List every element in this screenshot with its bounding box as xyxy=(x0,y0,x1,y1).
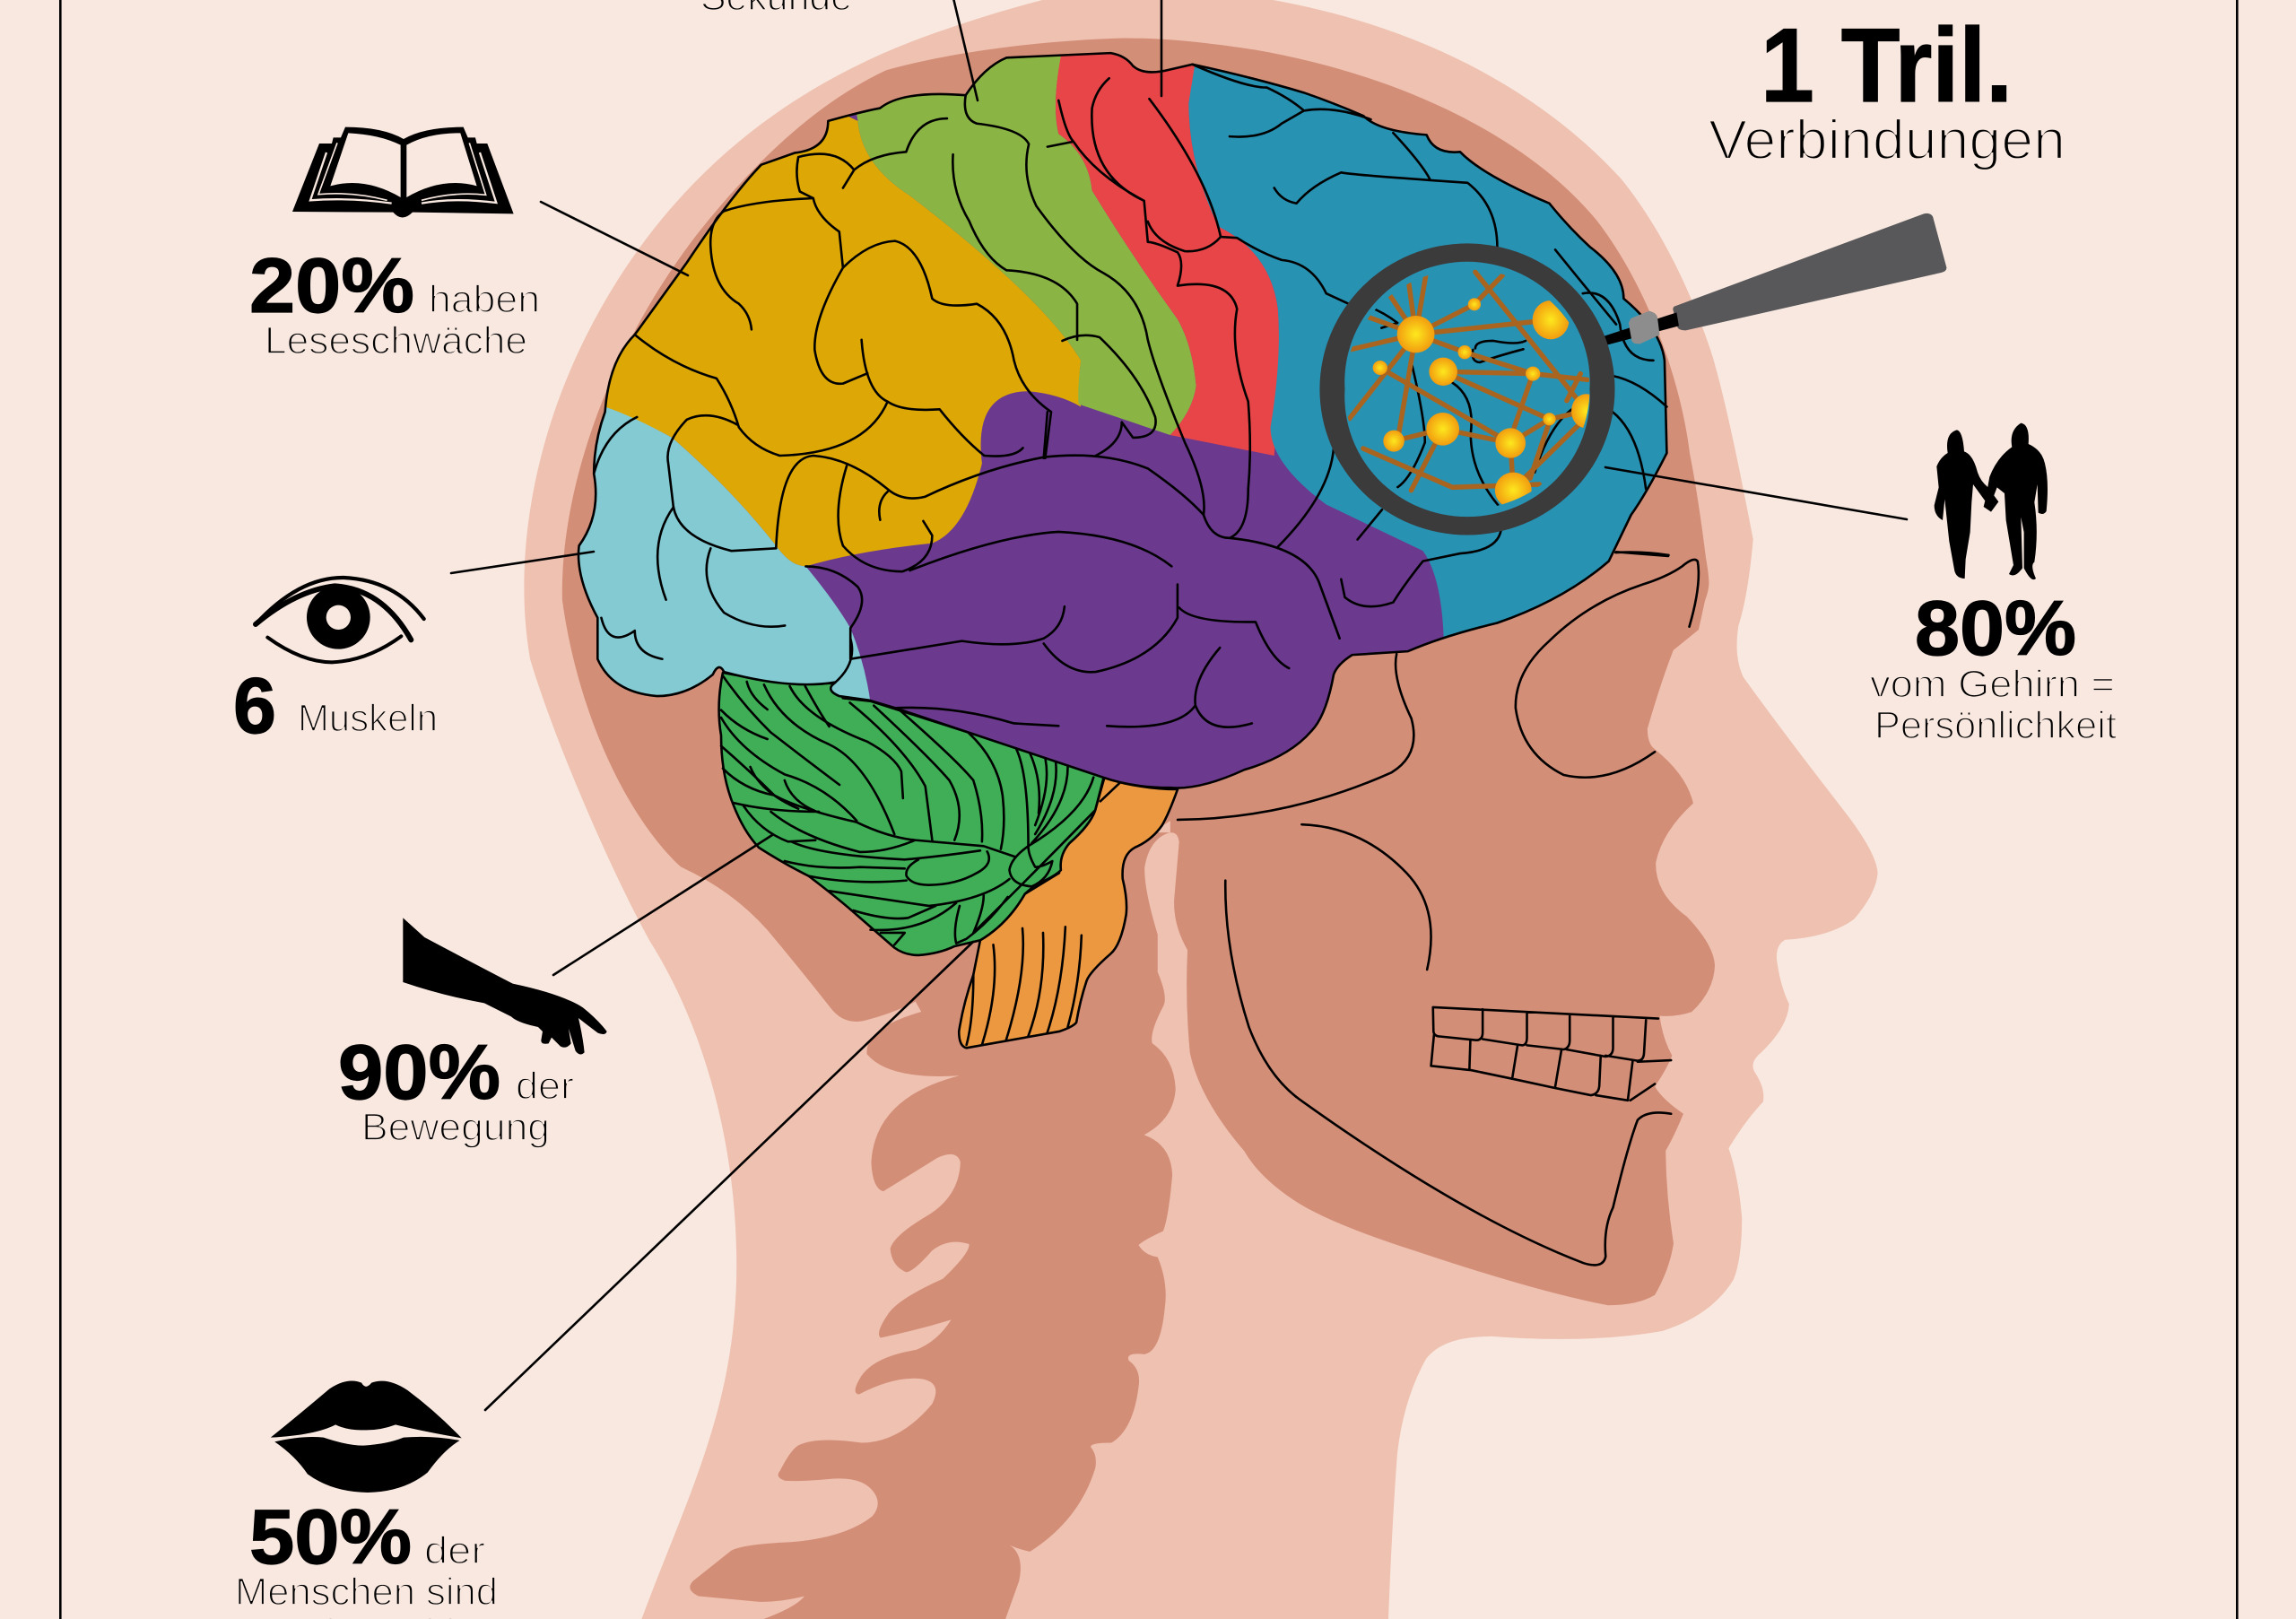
brain outline xyxy=(578,53,1666,788)
stat: 6 Muskeln: Muskeln xyxy=(298,697,438,740)
stat: 50% der Menschen xyxy=(235,1494,498,1619)
stat: 20% Leseschwäche: 20% xyxy=(249,243,414,329)
label: 1 Tril. Verbindungen: 1 Tril. xyxy=(1761,6,2013,124)
pointer lines xyxy=(451,0,1907,1410)
stat: 50% der Menschen: Menschen sind xyxy=(235,1571,498,1614)
stat: 80% Persönlichkeit xyxy=(1870,586,2117,747)
stat: 90% Bewegung: der xyxy=(516,1065,574,1108)
frontal lobe xyxy=(1188,66,1666,637)
brain stem xyxy=(959,778,1178,1048)
icon: book xyxy=(292,127,514,217)
collar xyxy=(1629,311,1660,344)
parietal lobe xyxy=(583,103,1081,566)
stat: 6 Muskeln: 6 xyxy=(233,661,276,750)
stat: 20% Leseschwäche xyxy=(249,243,540,362)
label: 1 Tril. Verbindungen xyxy=(1709,6,2066,171)
icon: couple xyxy=(1935,423,2048,579)
stat: 50% der Menschen: 50% xyxy=(249,1494,412,1580)
stat: 80% Persönlichkeit: 80% xyxy=(1915,586,2076,672)
teeth xyxy=(1431,1007,1671,1101)
stat: 20% Leseschwäche: Leseschwäche xyxy=(265,319,527,362)
icon: hand xyxy=(403,918,607,1054)
label: 1 Tril. Verbindungen: Verbindungen xyxy=(1709,109,2066,171)
occipital lobe xyxy=(579,407,870,700)
cerebrum xyxy=(578,52,1670,789)
temporal lobe xyxy=(657,77,1444,788)
head silhouette xyxy=(524,0,1878,1619)
icon: eye xyxy=(256,578,424,662)
stat: 50% der Menschen: der xyxy=(424,1529,485,1572)
lens ring xyxy=(1319,243,1615,535)
icon: lips xyxy=(271,1380,462,1493)
stat: 90% Bewegung xyxy=(338,1030,574,1149)
lens with neurons xyxy=(1347,269,1589,506)
stat: 20% Leseschwäche: haben xyxy=(429,278,540,321)
stat: 90% Bewegung: Bewegung xyxy=(361,1106,550,1149)
skull line details xyxy=(1178,553,1699,1265)
magnifying glass xyxy=(1319,213,1946,535)
somatosensory cortex xyxy=(850,47,1196,435)
stat: 80% Persönlichkeit: Persönlichkeit xyxy=(1874,704,2117,747)
stat: 80% Persönlichkeit: vom Gehirn = xyxy=(1870,663,2115,706)
stat: 6 Muskeln xyxy=(233,661,438,750)
cerebellum xyxy=(719,673,1167,955)
handle xyxy=(1673,213,1946,330)
brain folds xyxy=(594,65,1668,727)
rod xyxy=(1599,312,1679,345)
motor cortex xyxy=(1056,41,1279,456)
stat: 90% Bewegung: 90% xyxy=(338,1030,500,1116)
skull and spine xyxy=(562,38,1715,1619)
